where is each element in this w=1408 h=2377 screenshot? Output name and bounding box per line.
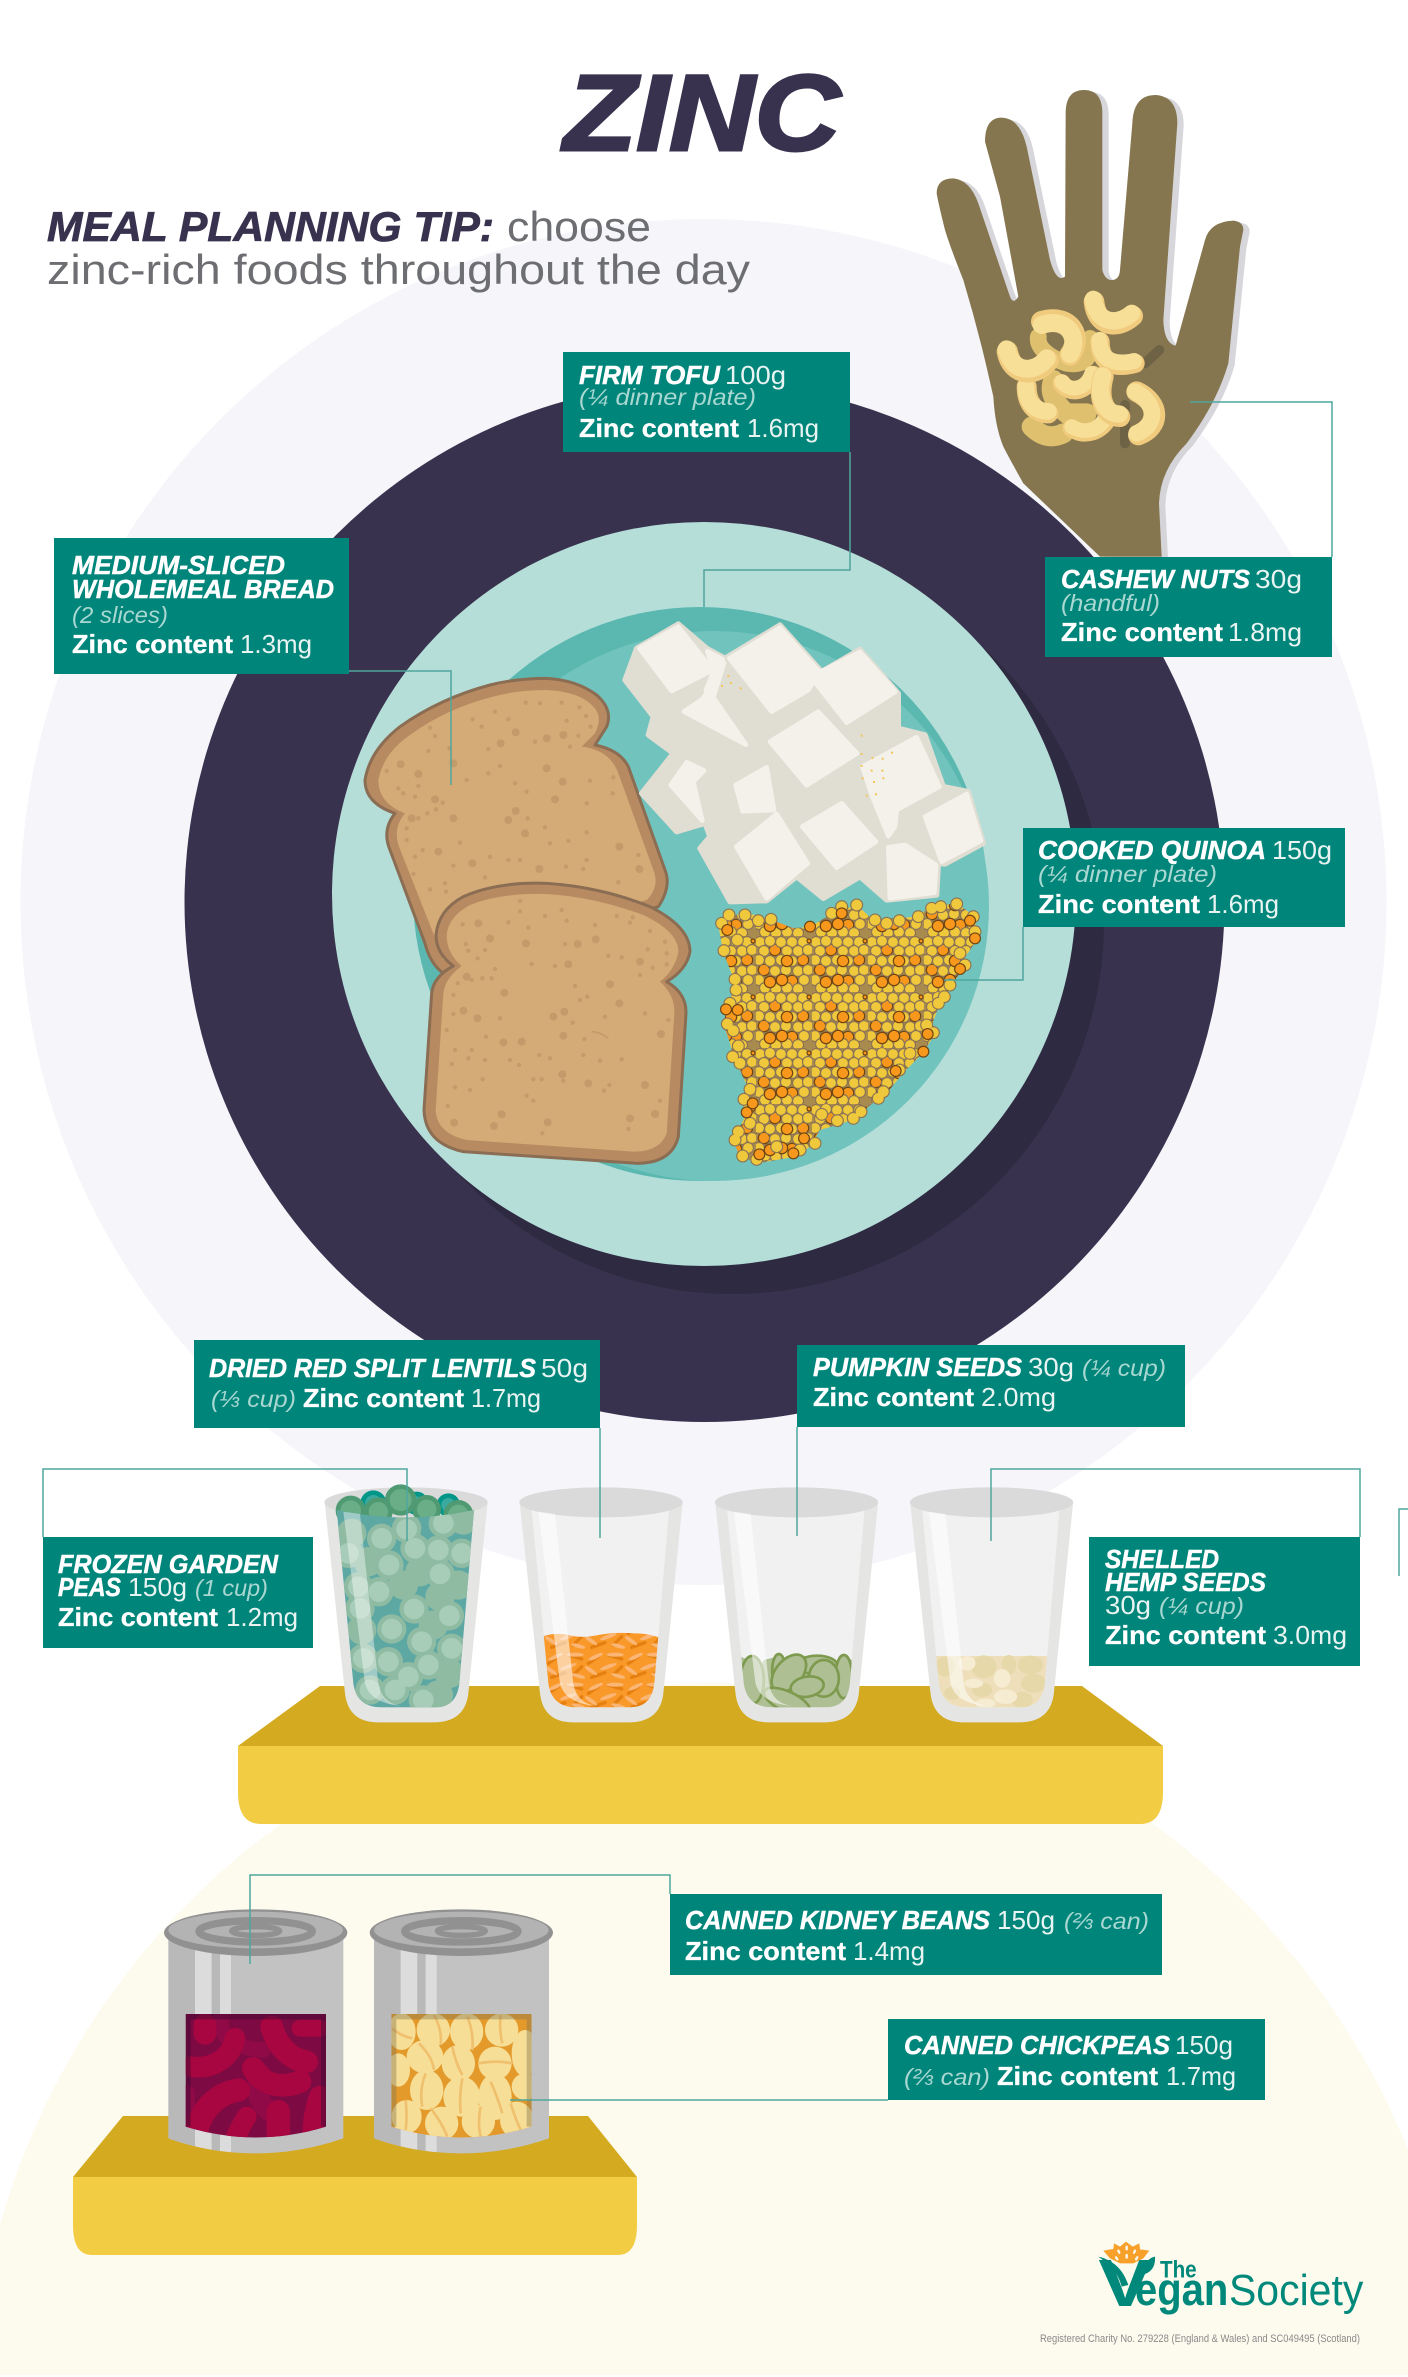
can lid [370, 1909, 553, 1956]
label: firm tofu: FIRM TOFU [579, 360, 721, 390]
back bread slice [365, 678, 667, 973]
label: pumpkin seeds: 2.0mg [981, 1382, 1056, 1412]
cashews [1007, 299, 1155, 436]
label: firm tofu: 1.6mg [747, 413, 819, 443]
glass highlight [343, 1512, 402, 1706]
icon: orange flower [1103, 2242, 1149, 2263]
glass: dried red split lentils [519, 1487, 683, 1722]
food: bread slices [365, 678, 690, 1163]
food: cooked quinoa [718, 903, 977, 1163]
logo: The Vegan Society: Society [1229, 2266, 1363, 2315]
label: firm tofu: (¼ dinner plate) [579, 384, 756, 410]
label: frozen garden peas: FROZEN GARDEN [58, 1549, 279, 1579]
label: cooked quinoa [1023, 828, 1345, 927]
label: cashew nuts: 30g [1255, 564, 1302, 594]
label: dried red split lentils [194, 1340, 600, 1428]
label: canned chickpeas: 1.7mg [1166, 2061, 1236, 2091]
plate shadow [360, 550, 1104, 1294]
connector: quinoa [944, 927, 1023, 980]
label: dried red split lentils: DRIED RED SPLIT LENTILS [209, 1353, 537, 1383]
label: canned chickpeas [888, 2019, 1265, 2100]
label: canned kidney beans: (⅔ can) [1064, 1908, 1149, 1934]
can: kidney beans [164, 1909, 347, 2157]
label: canned chickpeas: (⅔ can) [904, 2064, 990, 2090]
label: frozen garden peas: 150g [128, 1572, 187, 1602]
connector: cropped bracket at right edge [1399, 1509, 1408, 1576]
connector: firm tofu [704, 452, 850, 607]
label: frozen garden peas: Zinc content [58, 1602, 218, 1632]
connector: lentils [599, 1428, 601, 1538]
label: dried red split lentils: (⅓ cup) [211, 1386, 296, 1412]
food: tofu cubes [625, 624, 983, 902]
chickpeas window [387, 2013, 538, 2140]
label: dried red split lentils: 1.7mg [471, 1383, 541, 1413]
connector: pumpkin seeds [796, 1427, 798, 1536]
hand [937, 90, 1243, 557]
icon: leaves [1098, 2257, 1155, 2287]
pea tops [338, 1487, 471, 1528]
label: cooked quinoa: COOKED QUINOA [1038, 835, 1266, 865]
label: cashew nuts: (handful) [1061, 590, 1160, 616]
label: canned kidney beans: Zinc content [685, 1936, 846, 1966]
lentils contents [544, 1632, 658, 1708]
glass: frozen garden peas [324, 1487, 488, 1722]
label: pumpkin seeds [797, 1345, 1185, 1427]
label: cooked quinoa: 150g [1272, 835, 1332, 865]
label: pumpkin seeds: 30g [1028, 1352, 1074, 1382]
label: wholemeal bread: WHOLEMEAL BREAD [72, 574, 334, 604]
label: cashew nuts: CASHEW NUTS [1061, 564, 1251, 594]
registered charity text: Registered Charity No. 279228 (England & Wales) and SC049495 (Scotland) [1040, 2333, 1360, 2345]
label: canned chickpeas: Zinc content [997, 2061, 1158, 2091]
logo: The Vegan Society: The [1160, 2257, 1197, 2284]
label: frozen garden peas: (1 cup) [195, 1575, 268, 1601]
background: cream dome [0, 1683, 1408, 2375]
label: firm tofu: 100g [725, 360, 786, 390]
label: shelled hemp seeds: 3.0mg [1273, 1620, 1347, 1650]
title: ZINC [561, 52, 842, 173]
label: shelled hemp seeds: SHELLED [1105, 1544, 1219, 1574]
label: cashew nuts: 1.8mg [1228, 617, 1302, 647]
label: shelled hemp seeds: (¼ cup) [1159, 1593, 1244, 1619]
label: canned chickpeas: 150g [1175, 2030, 1233, 2060]
can lid [164, 1909, 347, 1956]
hand shadow [943, 92, 1250, 559]
connector: chickpeas [510, 2099, 888, 2101]
label: shelled hemp seeds: Zinc content [1105, 1620, 1266, 1650]
logo: The Vegan Society: egan [1135, 2264, 1228, 2315]
label: frozen garden peas: PEAS [58, 1572, 122, 1602]
glass highlight [538, 1512, 597, 1706]
label: shelled hemp seeds [1089, 1537, 1360, 1666]
pumpkin seeds contents [741, 1652, 852, 1708]
kidney beans window [183, 2013, 328, 2143]
label: cashew nuts: Zinc content [1061, 617, 1223, 647]
label: pumpkin seeds: PUMPKIN SEEDS [813, 1352, 1023, 1382]
label: wholemeal bread: (2 slices) [72, 602, 168, 628]
hemp seeds contents [935, 1655, 1048, 1709]
glass highlight [734, 1512, 792, 1706]
label: cashew nuts [1045, 557, 1332, 657]
can: chickpeas [370, 1909, 553, 2157]
label: cooked quinoa: 1.6mg [1207, 889, 1279, 919]
front bread slice [424, 883, 690, 1163]
label: cooked quinoa: Zinc content [1038, 889, 1200, 919]
label: pumpkin seeds: Zinc content [813, 1382, 974, 1412]
background: dark navy circle [184, 382, 1224, 1422]
label: canned kidney beans [670, 1894, 1162, 1975]
label: shelled hemp seeds: 30g [1105, 1590, 1151, 1620]
label: canned chickpeas: CANNED CHICKPEAS [904, 2030, 1171, 2060]
glass: shelled hemp seeds [910, 1487, 1073, 1722]
label: dried red split lentils: Zinc content [303, 1383, 464, 1413]
meal planning tip text: MEAL PLANNING TIP: [47, 203, 494, 250]
glass: pumpkin seeds [715, 1487, 878, 1722]
meal planning tip text: zinc-rich foods throughout the day [47, 246, 750, 293]
label: wholemeal bread [54, 538, 349, 674]
plate [332, 522, 1076, 1266]
connector: cashew nuts [1190, 402, 1332, 557]
label: dried red split lentils: 50g [541, 1353, 588, 1383]
label: pumpkin seeds: (¼ cup) [1082, 1355, 1166, 1381]
label: canned kidney beans: CANNED KIDNEY BEANS [685, 1905, 991, 1935]
label: shelled hemp seeds: HEMP SEEDS [1105, 1567, 1267, 1597]
palm crease [1125, 350, 1159, 443]
connector: peas [43, 1469, 407, 1541]
glass highlight [929, 1512, 987, 1706]
meal planning tip text: choose [507, 203, 651, 250]
label: frozen garden peas [43, 1537, 313, 1648]
label: frozen garden peas: 1.2mg [226, 1602, 298, 1632]
label: firm tofu [563, 352, 850, 452]
label: canned kidney beans: 1.4mg [853, 1936, 925, 1966]
peas contents [333, 1503, 477, 1710]
label: wholemeal bread: Zinc content [72, 629, 233, 659]
label: canned kidney beans: 150g [997, 1905, 1055, 1935]
connector: kidney beans [250, 1875, 670, 1964]
background: pale lilac circle [20, 219, 1386, 1585]
yellow shelf for glasses [238, 1686, 1163, 1824]
connector: bread [349, 671, 451, 785]
label: wholemeal bread: MEDIUM-SLICED [72, 550, 285, 580]
label: cooked quinoa: (¼ dinner plate) [1038, 861, 1217, 887]
yellow shelf for cans [73, 2116, 637, 2255]
illustration: hand holding cashews [937, 90, 1250, 559]
logo: The Vegan Society [1098, 2242, 1363, 2321]
meal planning tip text [47, 203, 750, 293]
label: wholemeal bread: 1.3mg [240, 629, 312, 659]
logo: The Vegan Society: V [1098, 2247, 1152, 2321]
label: firm tofu: Zinc content [579, 413, 739, 443]
connector: hemp seeds [991, 1469, 1360, 1541]
